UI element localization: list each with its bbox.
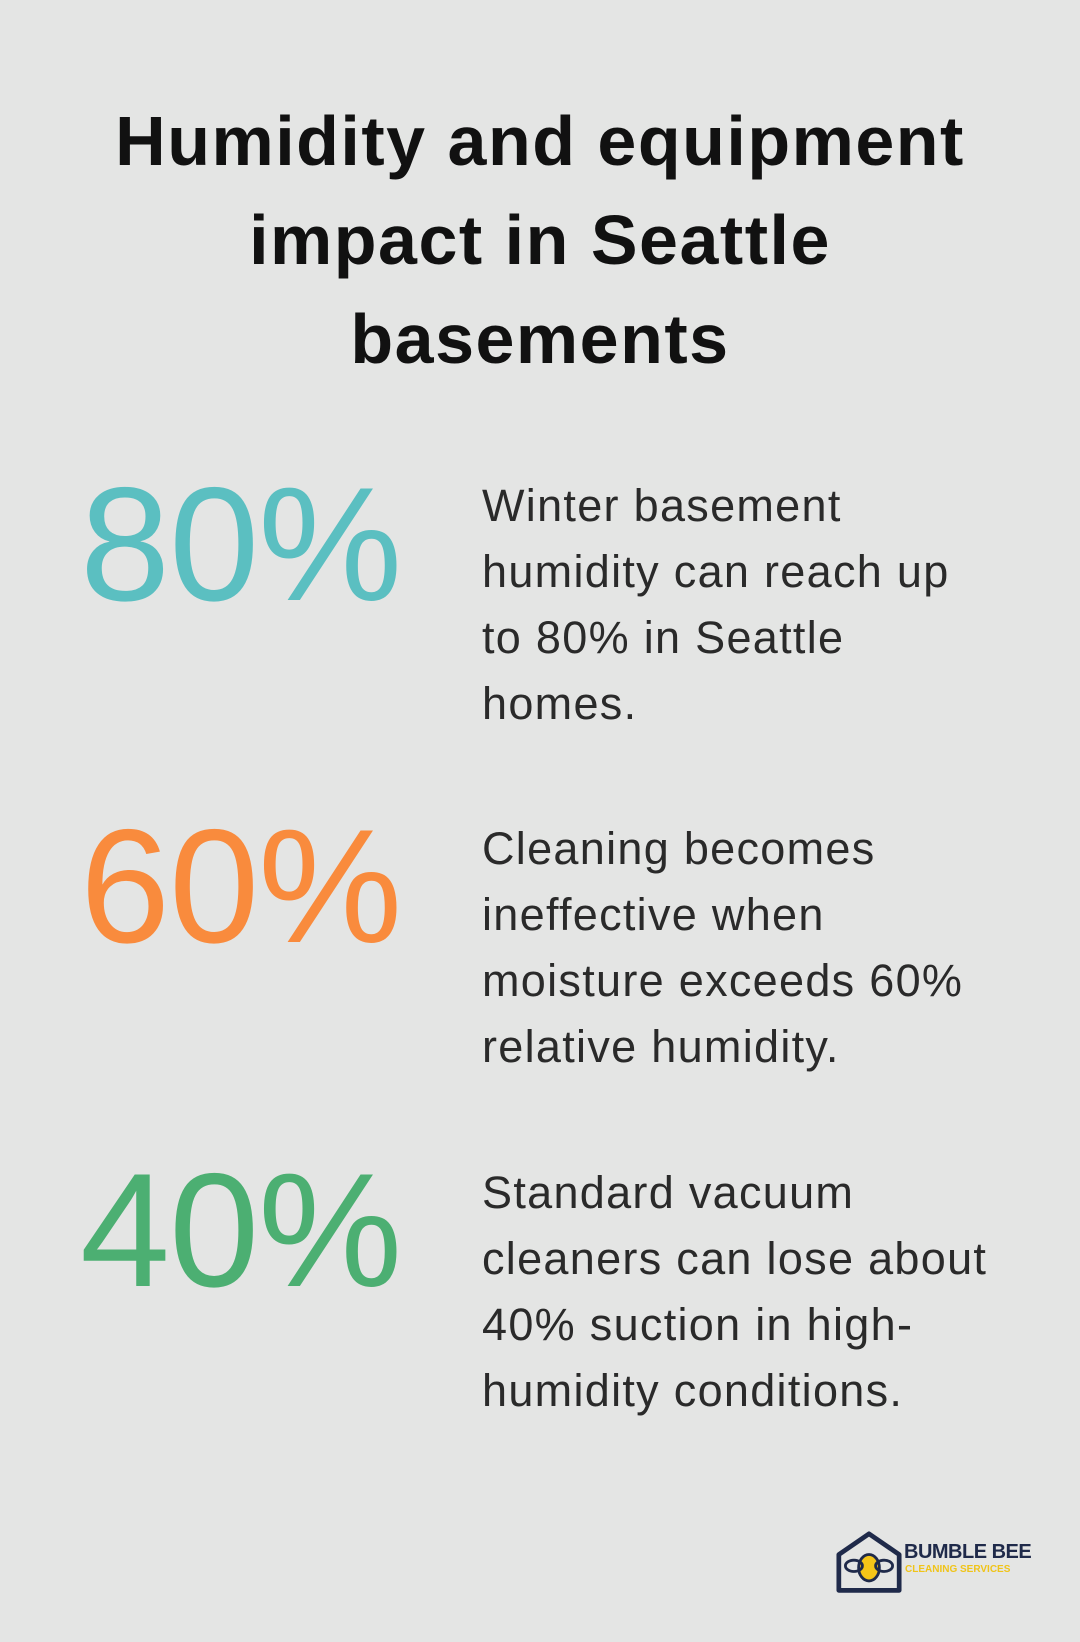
text 40%: humidity conditions. bbox=[482, 1365, 903, 1416]
text 40%: cleaners can lose about bbox=[482, 1233, 987, 1284]
text 40%: Standard vacuum bbox=[482, 1167, 854, 1218]
text 60% bbox=[482, 823, 963, 1072]
title bbox=[115, 102, 965, 378]
text 60%: moisture exceeds 60% bbox=[482, 955, 963, 1006]
stat 40%: 40% bbox=[80, 1140, 401, 1321]
title: impact in Seattle bbox=[249, 201, 831, 279]
text 60%: relative humidity. bbox=[482, 1021, 840, 1072]
title: basements bbox=[350, 300, 730, 378]
text 60%: ineffective when bbox=[482, 889, 825, 940]
logo: CLEANING SERVICES bbox=[905, 1564, 1010, 1575]
text 40% bbox=[482, 1167, 987, 1416]
stat 60%: 60% bbox=[80, 796, 401, 977]
title: Humidity and equipment bbox=[115, 102, 965, 180]
text 80%: Winter basement bbox=[482, 480, 842, 531]
text 80%: humidity can reach up bbox=[482, 546, 950, 597]
logo text: BUMBLE BEE bbox=[904, 1541, 1031, 1563]
text 80% bbox=[482, 480, 950, 729]
logo bbox=[836, 1531, 1031, 1593]
icon: bee house bbox=[836, 1531, 902, 1593]
text 80%: homes. bbox=[482, 678, 637, 729]
stat 80%: 80% bbox=[80, 454, 401, 635]
text 40%: 40% suction in high- bbox=[482, 1299, 913, 1350]
text 80%: to 80% in Seattle bbox=[482, 612, 844, 663]
text 60%: Cleaning becomes bbox=[482, 823, 876, 874]
